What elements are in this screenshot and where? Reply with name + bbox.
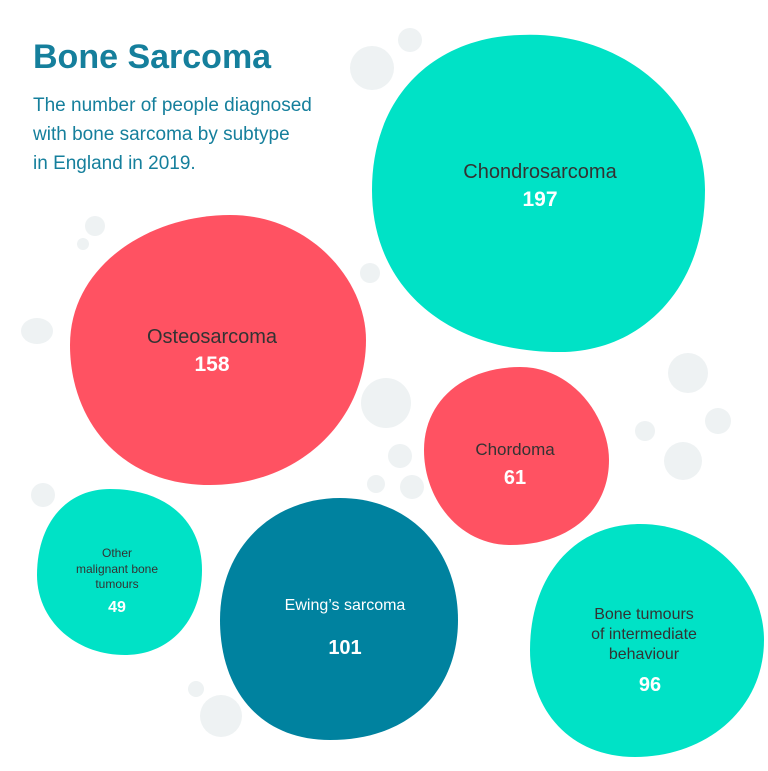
bubble: Osteosarcoma: Osteosarcoma	[147, 326, 278, 348]
bubble: Ewing's sarcoma: 101	[328, 637, 362, 659]
subtitle: in England in 2019.	[33, 153, 196, 174]
subtitle: The number of people diagnosed	[33, 95, 312, 116]
bubble: Bone tumours of intermediate behaviour: 96	[639, 674, 661, 696]
bubble: Bone tumours of intermediate behaviour: Bone tumours	[594, 606, 694, 623]
title: Bone Sarcoma	[33, 38, 272, 76]
bubble: Other malignant bone tumours: Other	[102, 546, 132, 560]
bubble: Chordoma: Chordoma	[475, 440, 555, 459]
bubble: Chordoma	[424, 367, 609, 545]
bubble: Other malignant bone tumours: malignant bone	[76, 562, 158, 576]
bubble: Other malignant bone tumours: 49	[108, 599, 126, 616]
bubble: Other malignant bone tumours: tumours	[95, 577, 139, 591]
bubble: Other malignant bone tumours	[37, 489, 202, 655]
bubble: Osteosarcoma	[70, 215, 366, 485]
subtitle: with bone sarcoma by subtype	[32, 124, 290, 145]
subtitle	[32, 95, 312, 174]
bubble: Bone tumours of intermediate behaviour: behaviour	[609, 646, 680, 663]
bubble: Chondrosarcoma	[372, 35, 705, 352]
bubble: Chondrosarcoma: Chondrosarcoma	[463, 161, 618, 183]
bubble: Chondrosarcoma: 197	[522, 188, 558, 211]
bubble: Bone tumours of intermediate behaviour	[530, 524, 764, 757]
bubble: Bone tumours of intermediate behaviour: of intermediate	[591, 626, 697, 643]
bubble: Ewing's sarcoma	[220, 498, 458, 740]
bubble: Ewing's sarcoma: Ewing’s sarcoma	[285, 597, 405, 614]
bubble: Chordoma: 61	[504, 467, 526, 489]
bubble: Osteosarcoma: 158	[194, 353, 230, 376]
